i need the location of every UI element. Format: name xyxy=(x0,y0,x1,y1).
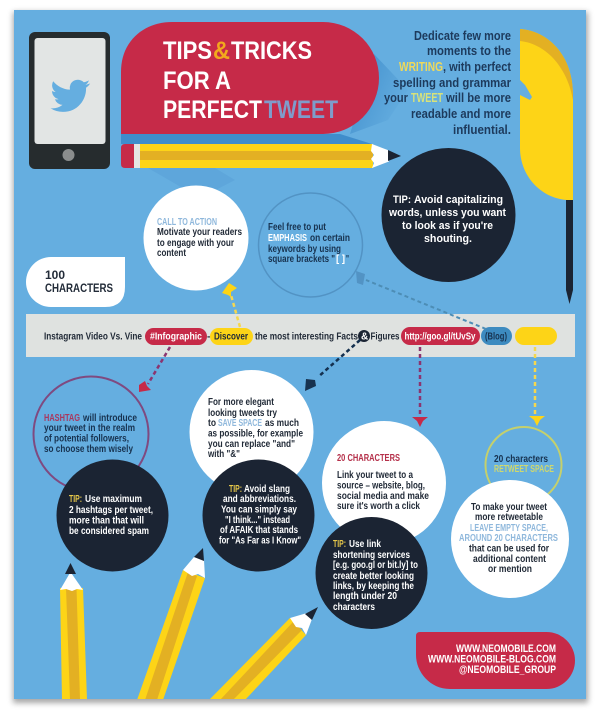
link pill xyxy=(401,327,480,345)
hashtag pill: #Infographic xyxy=(150,332,202,342)
tip circle: hashtags: be considered spam xyxy=(69,526,149,537)
ampersand badge xyxy=(358,330,370,342)
tip circle: slang: and abbreviations. xyxy=(223,494,296,505)
circle: call to action: content xyxy=(157,248,187,259)
intro paragraph: will be more xyxy=(445,91,511,105)
circle: emphasis: [ ] xyxy=(336,254,345,265)
tip circle: capitalizing: TIP: xyxy=(393,194,411,206)
tip circle: capitalizing: to look as if you're xyxy=(402,220,493,232)
circle: leave empty space: LEAVE EMPTY SPACE, xyxy=(470,523,548,534)
arrow: blog to emphasis xyxy=(356,271,486,329)
tip circle: slang: for "As Far as I Know" xyxy=(219,536,301,546)
circle: call to action: to engage with your xyxy=(157,238,234,249)
discover pill: Discover xyxy=(214,332,248,342)
tip circle: hashtags xyxy=(56,460,168,572)
tweet bar xyxy=(26,314,575,357)
circle: leave empty space: or mention xyxy=(488,564,532,575)
circle: call to action: Motivate your readers xyxy=(157,227,242,238)
tip circle: capitalizing: shouting. xyxy=(424,233,472,245)
circle: call to action: CALL TO ACTION xyxy=(157,217,217,228)
circle: save space xyxy=(190,370,314,494)
tip circle: link shortening: [e.g. goo.gl or bit.ly] to xyxy=(333,560,418,571)
pencil one xyxy=(60,563,87,700)
circle: emphasis: keywords by using xyxy=(268,244,341,255)
circle: leave empty space: that can be used for xyxy=(469,544,549,554)
footer websites panel: WWW.NEOMOBILE.COM xyxy=(456,643,556,655)
arrow: ampersand xyxy=(305,340,360,391)
circle: emphasis: Feel free to put xyxy=(268,222,327,233)
circle: save space: SAVE SPACE xyxy=(218,418,262,429)
tip circle: link shortening: TIP: xyxy=(333,539,346,550)
intro paragraph: moments to the xyxy=(427,44,511,58)
circle: leave empty space: To make your tweet xyxy=(471,502,548,513)
circle: save space: with "&" xyxy=(207,449,240,460)
tweet bar: Instagram Video Vs. Vine xyxy=(44,332,142,342)
title: TIPS xyxy=(163,37,212,65)
circle: leave empty space xyxy=(451,480,569,598)
circle: emphasis: " xyxy=(346,254,349,265)
title: PERFECT xyxy=(163,96,262,124)
tweet bar: - xyxy=(207,332,210,342)
discover pill xyxy=(210,328,253,345)
intro paragraph: TWEET xyxy=(411,91,443,105)
circle: save space: looking tweets try xyxy=(208,408,277,419)
pencils xyxy=(60,548,318,700)
footer websites panel: WWW.NEOMOBILE-BLOG.COM xyxy=(428,654,556,666)
empty yellow pill xyxy=(515,327,557,345)
tip circle: link shortening: links, by keeping the xyxy=(333,581,414,592)
intro paragraph: your xyxy=(384,91,408,105)
circle: leave empty space: more retweetable xyxy=(475,512,543,523)
intro paragraph: spelling and grammar xyxy=(393,76,511,90)
ampersand badge: & xyxy=(361,332,368,342)
tip circle: link shortening: length under 20 xyxy=(333,591,397,602)
title xyxy=(163,37,338,124)
arrow: hashtag xyxy=(139,347,170,392)
intro paragraph: readable and more xyxy=(411,107,511,121)
ring: retweet space xyxy=(486,427,562,503)
circle: save space: as much xyxy=(265,418,299,429)
tip circle: hashtags: Use maximum xyxy=(85,494,142,505)
intro paragraph: Dedicate few more xyxy=(414,29,511,43)
tip circle: hashtags: 2 hashtags per tweet, xyxy=(69,505,153,516)
title: FOR A xyxy=(163,67,231,95)
circle: save space: For more elegant xyxy=(208,397,275,408)
link pill: http://goo.gl/tUvSy xyxy=(404,332,476,342)
tip circle: slang: You can simply say xyxy=(221,504,297,516)
tip circle: hashtags: more than that will xyxy=(69,516,144,526)
horizontal pencil xyxy=(121,144,401,168)
ring: hashtag: so choose them wisely xyxy=(44,444,133,455)
intro paragraph: , with perfect xyxy=(443,60,512,74)
tip circle: link shortening: create better looking xyxy=(333,571,414,582)
tip circle: hashtags: TIP: xyxy=(69,494,82,505)
tip circle: slang: "I think..." instead xyxy=(225,515,290,526)
horizontal pencil shadow xyxy=(148,168,235,198)
ring: hashtag: of potential followers, xyxy=(44,434,129,444)
circle: 20 characters: social media and make xyxy=(337,491,429,502)
blog pill xyxy=(481,327,512,345)
circle: save space: to xyxy=(208,418,216,429)
pencil two xyxy=(137,548,205,700)
tip circle: slang: of AFAIK that stands xyxy=(220,525,298,536)
circle: emphasis xyxy=(258,193,362,297)
intro paragraph xyxy=(384,29,512,137)
tip circle: slang: Avoid slang xyxy=(244,484,290,495)
ring: hashtag xyxy=(34,376,148,492)
ring: hashtag: will introduce xyxy=(82,413,137,424)
circle: leave empty space: additional content xyxy=(473,554,547,565)
ring: retweet space: RETWEET SPACE xyxy=(494,464,554,475)
title: TRICKS xyxy=(231,37,312,65)
icon: smartphone with twitter bird xyxy=(29,32,110,169)
ring: hashtag: HASHTAG xyxy=(44,413,80,424)
label: 100 characters: 100 xyxy=(45,270,65,282)
circle: save space: as possible, for example xyxy=(208,428,303,440)
circle: call to action xyxy=(144,186,248,290)
circle: 20 characters: source – website, blog, xyxy=(337,480,425,492)
title: & xyxy=(213,37,230,65)
title: TWEET xyxy=(264,96,338,124)
intro paragraph: WRITING xyxy=(399,60,443,74)
circle: 20 characters xyxy=(322,421,446,545)
circle: emphasis: on certain xyxy=(310,233,350,244)
circle: emphasis: square brackets " xyxy=(268,254,335,265)
ring: hashtag: your tweet in the realm xyxy=(44,423,135,434)
title banner shadow xyxy=(121,134,372,144)
tip circle: capitalizing: Avoid capitalizing xyxy=(414,194,503,206)
tweet bar: the most interesting Facts xyxy=(255,332,358,342)
tip circle: link shortening: Use link xyxy=(349,539,381,550)
arrow: link xyxy=(412,347,428,427)
hashtag pill xyxy=(145,328,207,345)
tip circle: link shortening: shortening services xyxy=(333,550,410,561)
circle: leave empty space: AROUND 20 CHARACTERS xyxy=(459,533,558,544)
circle: 20 characters: sure it's worth a click xyxy=(337,501,420,512)
arrow: discover to call to action xyxy=(222,283,240,327)
blog pill: (Blog) xyxy=(485,332,507,342)
circle: save space: you can replace "and" xyxy=(208,439,295,450)
circle: 20 characters: 20 CHARACTERS xyxy=(337,453,400,464)
arrow: retweet space xyxy=(529,347,545,426)
circle: emphasis: EMPHASIS xyxy=(268,233,307,244)
title banner xyxy=(121,22,379,134)
label: 100 characters: CHARACTERS xyxy=(45,283,113,295)
tip circle: link shortening: characters xyxy=(333,602,375,613)
intro paragraph: influential. xyxy=(453,123,511,137)
title banner side shadow xyxy=(350,54,408,134)
pencil three xyxy=(209,607,318,700)
tip circle: capitalizing xyxy=(382,148,516,282)
footer websites panel xyxy=(416,632,575,689)
tip circle: capitalizing: words, unless you want xyxy=(388,207,506,219)
label: 100 characters xyxy=(26,257,125,307)
icon: yellow quill xyxy=(520,29,573,304)
tip circle: slang xyxy=(202,460,314,572)
footer websites panel: @NEOMOBILE_GROUP xyxy=(459,664,556,676)
tip circle: slang: TIP: xyxy=(229,484,242,495)
circle: 20 characters: Link your tweet to a xyxy=(337,470,413,481)
ring: retweet space: 20 characters xyxy=(494,454,548,465)
tweet bar: Figures xyxy=(370,332,400,342)
tip circle: link shortening xyxy=(316,517,428,629)
